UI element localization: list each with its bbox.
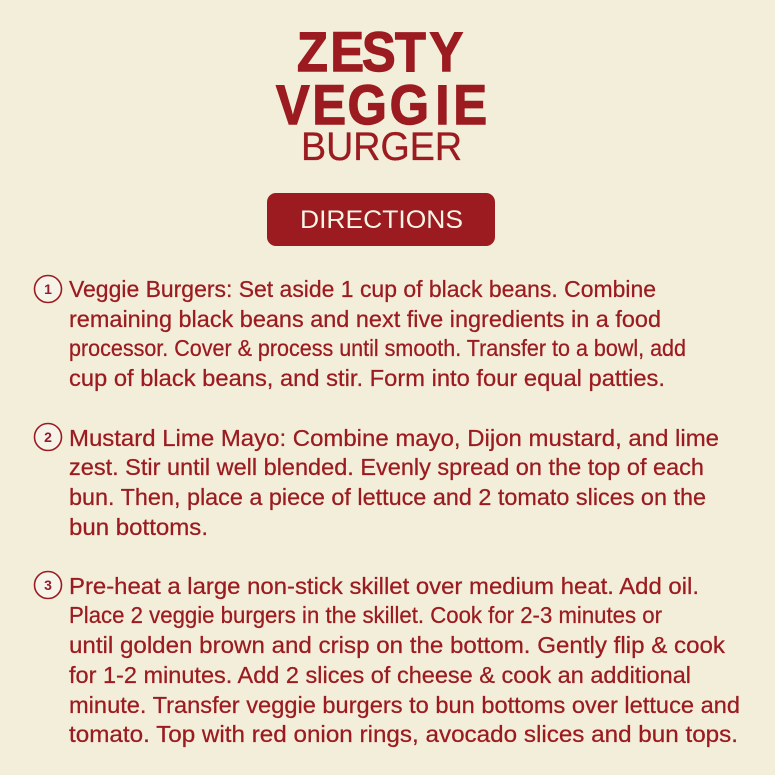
title: BURGER xyxy=(301,125,462,169)
step 1 text: Veggie Burgers: Set aside 1 cup of black beans. Combine xyxy=(69,276,656,302)
icon: number 3 xyxy=(34,572,62,598)
step 3 text: Place 2 veggie burgers in the skillet. Cook for 2-3 minutes or xyxy=(69,602,662,628)
step 2 text: zest. Stir until well blended. Evenly spread on the top of each xyxy=(69,454,704,480)
step 3 text xyxy=(69,573,740,747)
icon: number 2: 2 xyxy=(44,429,52,445)
directions button xyxy=(267,193,495,246)
step 1 text: processor. Cover & process until smooth. Transfer to a bowl, add xyxy=(69,335,686,361)
step 1 text: remaining black beans and next five ingredients in a food xyxy=(69,306,661,332)
step 1 text xyxy=(69,276,686,391)
title: ZESTY xyxy=(297,22,463,84)
step 3 text: minute. Transfer veggie burgers to bun bottoms over lettuce and xyxy=(69,692,740,718)
step 3 text: tomato. Top with red onion rings, avocado slices and bun tops. xyxy=(69,721,738,747)
icon: number 3: 3 xyxy=(44,577,52,593)
step 3 text: until golden brown and crisp on the bottom. Gently flip & cook xyxy=(69,632,726,658)
step 2 text: bun bottoms. xyxy=(69,514,208,540)
step 2 text xyxy=(69,425,719,540)
step 3 text: Pre-heat a large non-stick skillet over medium heat. Add oil. xyxy=(69,573,699,599)
icon: number 1 xyxy=(34,276,62,302)
directions button: DIRECTIONS xyxy=(300,206,463,234)
title xyxy=(276,22,487,169)
step 2 text: bun. Then, place a piece of lettuce and 2 tomato slices on the xyxy=(69,484,706,510)
title: VEGGIE xyxy=(276,75,487,137)
step 1 text: cup of black beans, and stir. Form into four equal patties. xyxy=(69,365,665,391)
icon: number 2 xyxy=(34,424,62,450)
step 1 xyxy=(34,276,686,391)
icon: number 1: 1 xyxy=(44,281,52,297)
step 2 text: Mustard Lime Mayo: Combine mayo, Dijon mustard, and lime xyxy=(69,425,719,451)
step 3 xyxy=(34,572,740,747)
step 3 text: for 1-2 minutes. Add 2 slices of cheese & cook an additional xyxy=(69,662,691,688)
step 2 xyxy=(34,424,719,540)
